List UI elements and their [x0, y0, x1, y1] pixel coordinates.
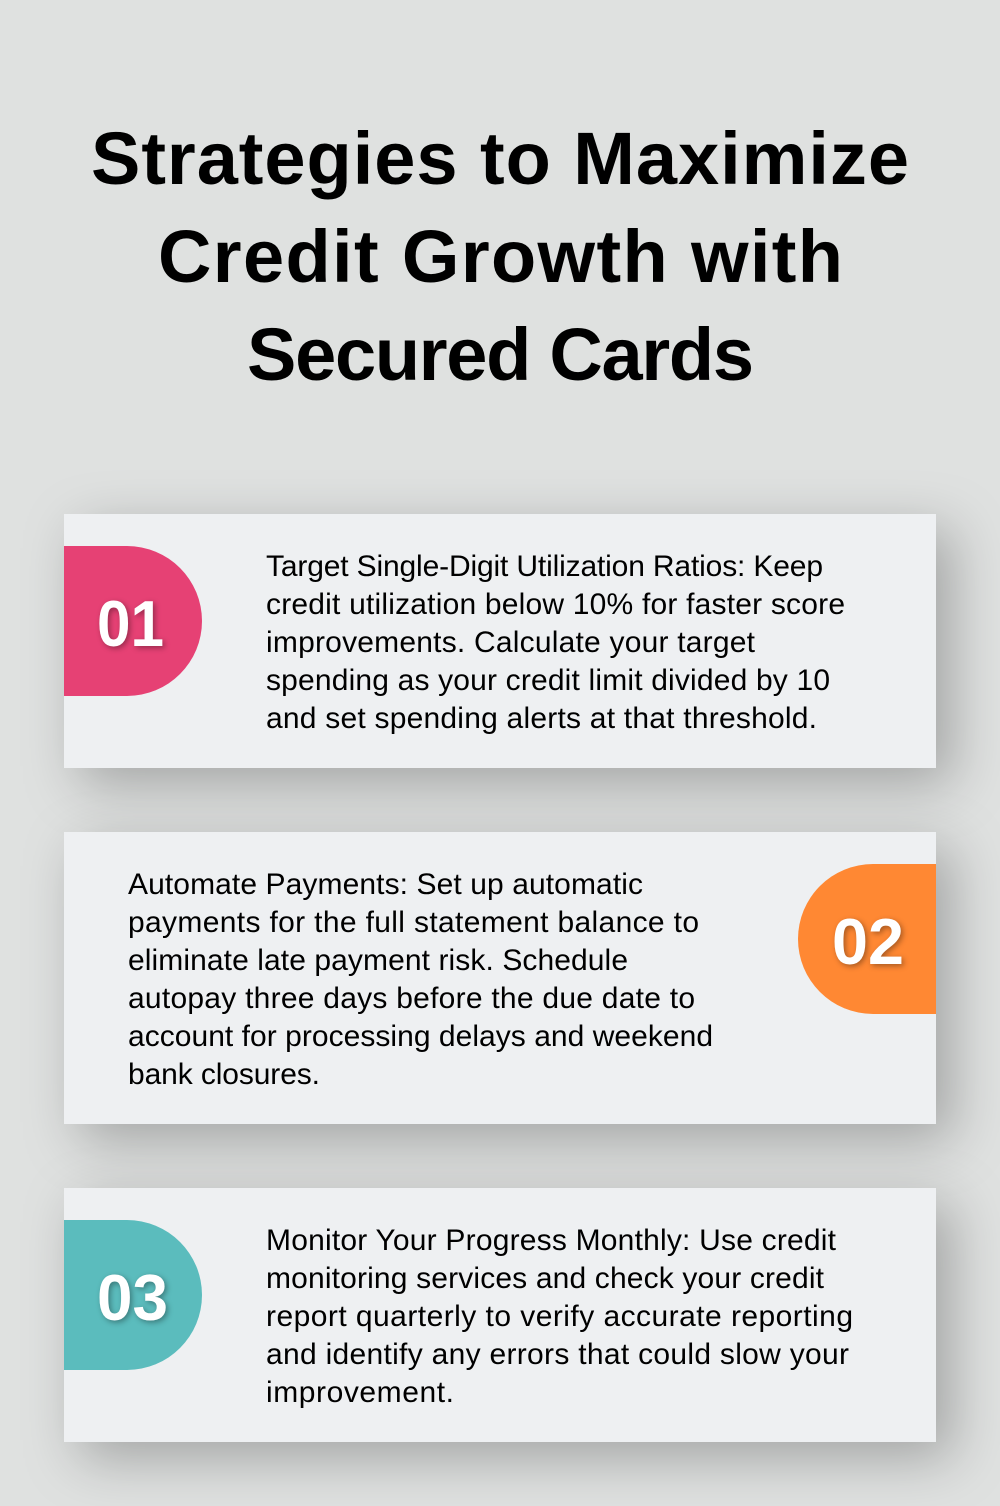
text: monitor your progress: monitoring services and check your credit	[266, 1262, 825, 1295]
text: target single-digit utilization: credit utilization below 10% for faster score	[266, 588, 845, 621]
text: monitor your progress: Monitor Your Progress Monthly: Use credit	[266, 1224, 837, 1257]
text: target single-digit utilization: Target Single-Digit Utilization Ratios: Keep	[266, 550, 823, 583]
text: automate payments: payments for the full statement balance to	[128, 906, 699, 939]
text: target single-digit utilization: spending as your credit limit divided by 10	[266, 664, 830, 697]
badge: 02	[798, 864, 936, 1014]
badge: 01	[64, 546, 202, 696]
panel: strategy 03	[64, 1188, 936, 1442]
text: automate payments: autopay three days before the due date to	[128, 982, 695, 1015]
text: target single-digit utilization	[266, 550, 845, 735]
text: monitor your progress: improvement.	[266, 1376, 454, 1409]
title	[91, 117, 909, 396]
text: target single-digit utilization: and set spending alerts at that threshold.	[266, 702, 817, 735]
badge: 01: 01	[97, 587, 164, 660]
title: Credit Growth with	[158, 215, 843, 298]
text: monitor your progress	[266, 1224, 853, 1409]
text: automate payments	[128, 868, 713, 1091]
badge: 02: 02	[832, 905, 904, 978]
text: automate payments: Automate Payments: Set up automatic	[128, 868, 643, 901]
text: target single-digit utilization: improvements. Calculate your target	[266, 626, 756, 659]
badge: 03: 03	[97, 1261, 168, 1334]
panel: strategy 02	[64, 832, 936, 1124]
text: automate payments: eliminate late payment risk. Schedule	[128, 944, 628, 977]
text: monitor your progress: report quarterly to verify accurate reporting	[266, 1300, 853, 1333]
text: automate payments: account for processing delays and weekend	[128, 1020, 713, 1053]
text: monitor your progress: and identify any errors that could slow your	[266, 1338, 849, 1371]
panel: strategy 01	[64, 514, 936, 768]
text: automate payments: bank closures.	[128, 1058, 320, 1091]
title: Strategies to Maximize	[91, 117, 909, 200]
title: Secured Cards	[247, 313, 754, 396]
badge: 03	[64, 1220, 202, 1370]
